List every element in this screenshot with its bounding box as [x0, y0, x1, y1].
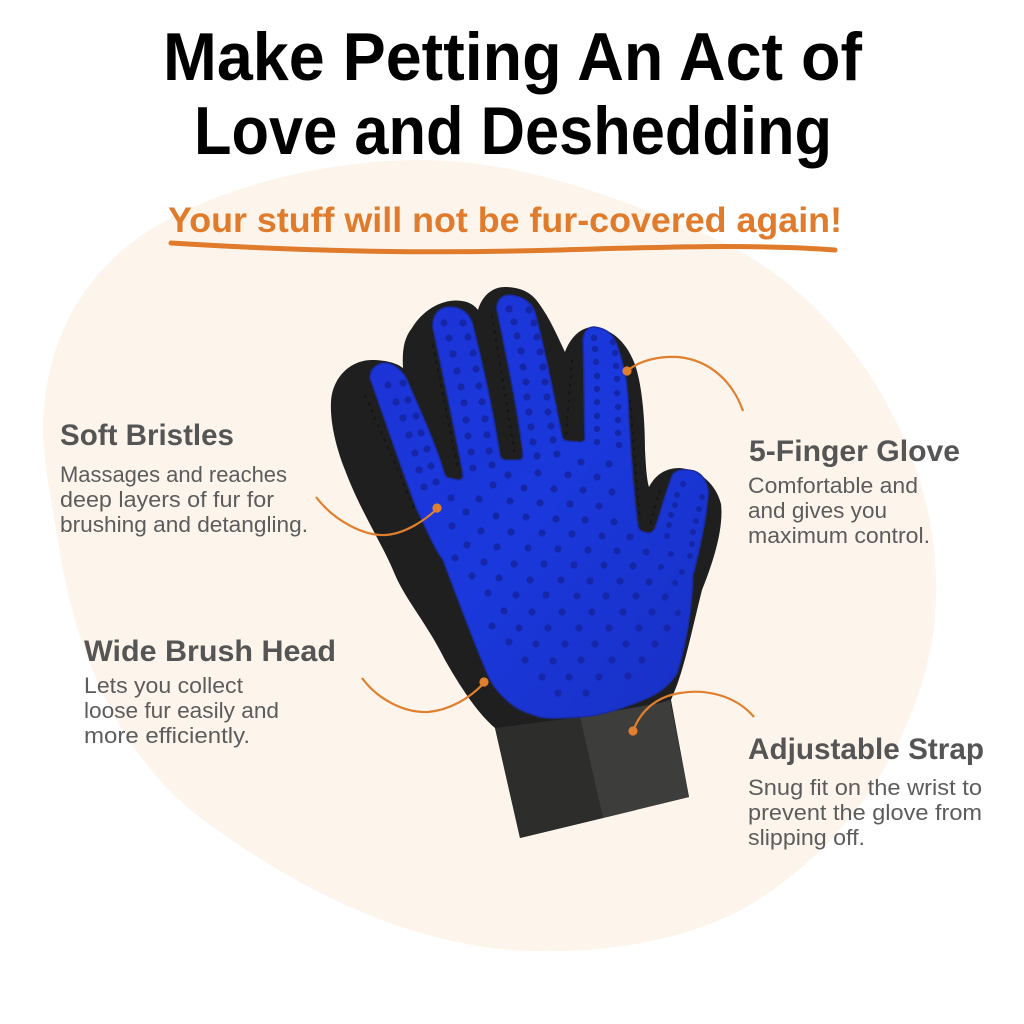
arrow: 5-finger glove pointer [624, 357, 743, 411]
glove mesh stitching [365, 315, 660, 525]
arrow: adjustable strap pointer [630, 692, 754, 734]
text: adjustable strap description: Snug fit on the wrist to [748, 775, 982, 800]
heading: 5-finger glove: 5-Finger Glove [749, 435, 960, 468]
text: 5-finger glove description: Comfortable and [748, 473, 918, 498]
text: wide brush head description [84, 673, 279, 748]
wrist strap left [495, 717, 603, 838]
title: Make Petting An Act of [163, 19, 862, 95]
title: Love and Deshedding [194, 93, 832, 169]
title [163, 19, 862, 169]
text: adjustable strap description [748, 775, 982, 850]
blue brush pad [370, 295, 708, 718]
text: 5-finger glove description [748, 473, 930, 548]
heading: soft bristles: Soft Bristles [60, 419, 234, 452]
text: soft bristles description: brushing and detangling. [60, 512, 308, 537]
subtitle with underline: Your stuff will not be fur-covered again! [168, 201, 842, 240]
glove back layer [331, 287, 721, 838]
arrow: soft bristles pointer [316, 497, 440, 535]
text: wide brush head description: more efficiently. [84, 723, 250, 748]
callout: wide brush head [84, 635, 488, 748]
callout: adjustable strap [630, 692, 984, 850]
text: adjustable strap description: slipping off. [748, 825, 865, 850]
text: wide brush head description: loose fur easily and [84, 698, 279, 723]
callout: soft bristles [60, 419, 440, 537]
heading: wide brush head: Wide Brush Head [84, 635, 336, 668]
brush bristle dots [384, 305, 705, 697]
arrow: wide brush head pointer [362, 678, 488, 712]
text: soft bristles description: deep layers of fur for [60, 487, 274, 512]
background blob [43, 160, 936, 951]
text: soft bristles description [60, 462, 308, 537]
text: soft bristles description: Massages and reaches [60, 462, 287, 487]
text: 5-finger glove description: and gives you [748, 498, 887, 523]
callout: 5-finger glove [624, 357, 960, 548]
wrist strap right [580, 700, 689, 818]
glove illustration [331, 287, 721, 838]
heading: adjustable strap: Adjustable Strap [748, 733, 984, 766]
text: wide brush head description: Lets you collect [84, 673, 243, 698]
text: adjustable strap description: prevent the glove from [748, 800, 982, 825]
text: 5-finger glove description: maximum control. [748, 523, 930, 548]
